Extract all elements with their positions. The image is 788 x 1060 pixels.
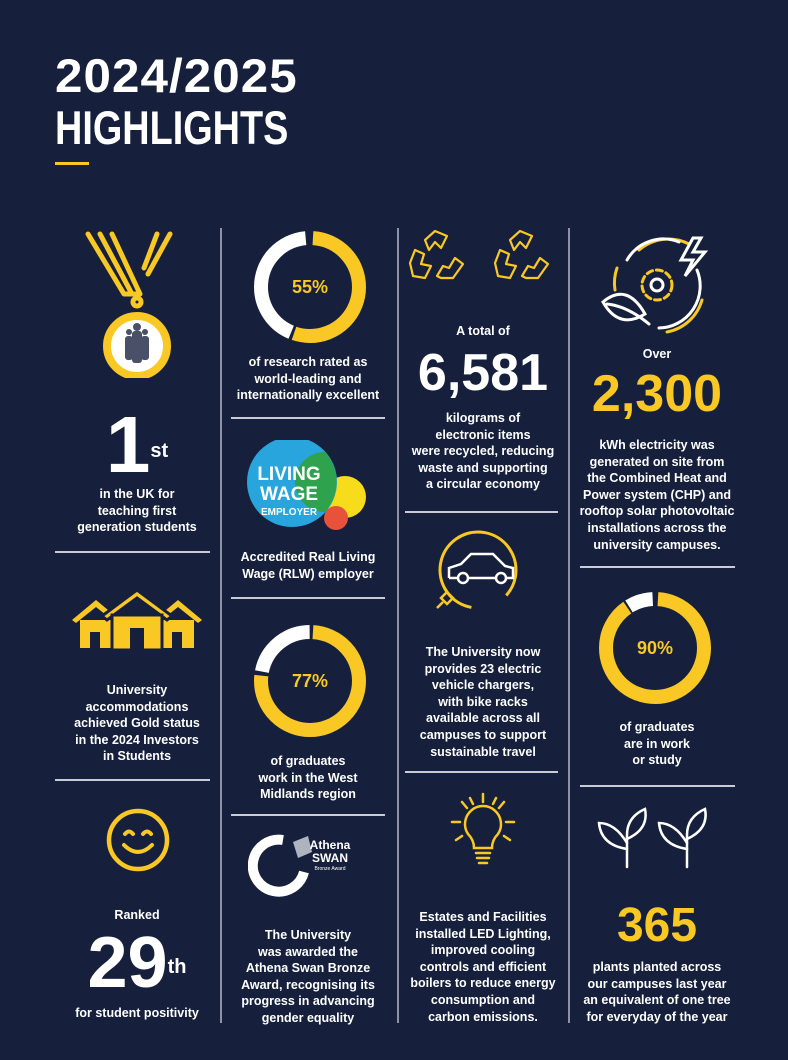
panel: athena swan: gender equality <box>262 1011 354 1025</box>
panel: electricity: installations across the <box>588 521 726 535</box>
chart: donut 55 <box>254 231 366 343</box>
icon: living wage logo: LIVING <box>257 464 321 485</box>
panel: athena swan: The University <box>265 928 351 942</box>
panel: athena swan: Award, recognising its <box>241 978 375 992</box>
panel: graduates 90%: are in work <box>624 737 690 751</box>
panel: graduates West Midlands 77% <box>254 625 366 801</box>
panel: recycling: electronic items <box>435 428 531 442</box>
panel: LED lighting: carbon emissions. <box>428 1010 538 1024</box>
icon: leaves <box>598 807 707 868</box>
panel: electricity: university campuses. <box>593 538 721 552</box>
panel: plants: our campuses last year <box>588 977 726 991</box>
panel: LED lighting: improved cooling <box>431 943 535 957</box>
panel: accommodation: University <box>107 683 167 697</box>
icon: athena swan logo: Athena <box>310 838 351 852</box>
panel: research 55%: of research rated as <box>249 355 367 369</box>
icon: athena swan logo: SWAN <box>312 851 348 865</box>
chart: donut 90: 90% <box>637 638 673 658</box>
icon: living wage logo: WAGE <box>260 484 318 505</box>
panel: EV chargers: The University now <box>426 645 540 659</box>
icon: living wage logo <box>247 440 366 530</box>
icon: light bulb <box>450 792 516 864</box>
panel: accommodation: achieved Gold status <box>74 716 200 730</box>
panel: LED lighting: boilers to reduce energy <box>410 976 556 990</box>
panel: recycling: waste and supporting <box>418 461 548 475</box>
panel: living wage: Accredited Real Living <box>241 550 375 564</box>
panel: electricity: the Combined Heat and <box>587 471 727 485</box>
panel: EV chargers <box>420 530 546 759</box>
panel: electricity: rooftop solar photovoltaic <box>580 504 734 518</box>
panel: plants: an equivalent of one tree <box>583 993 731 1007</box>
big: 365: 365 <box>617 899 697 952</box>
chart: donut 90 <box>599 592 711 704</box>
big: 6,581: 6,581 <box>418 344 548 402</box>
chart: donut 77 <box>254 625 366 737</box>
panel: accommodation: accommodations <box>86 700 188 714</box>
panel: recycling: were recycled, reducing <box>412 444 554 458</box>
panel: EV chargers: with bike racks <box>438 695 528 709</box>
panel: EV chargers: available across all <box>426 711 540 725</box>
panel: electricity: Power system (CHP) and <box>583 488 731 502</box>
panel: electricity: Over <box>643 347 671 361</box>
panel: recycling: A total of <box>456 324 510 338</box>
icon: athena swan logo: Bronze Award <box>314 866 346 872</box>
panel: student positivity: Ranked <box>114 908 160 922</box>
panel: EV chargers: campuses to support <box>420 728 546 742</box>
title <box>55 49 298 154</box>
panel: plants: plants planted across <box>593 960 721 974</box>
panel: EV chargers: vehicle chargers, <box>432 678 534 692</box>
panel: electricity: kWh electricity was <box>599 438 715 452</box>
panel: LED lighting: controls and efficient <box>420 960 546 974</box>
panel: student positivity <box>75 808 199 1020</box>
panel: student positivity: for student positivity <box>75 1006 199 1020</box>
big: 2,300: 2,300 <box>592 365 722 423</box>
panel: electricity <box>580 236 734 552</box>
panel: first generation: in the UK for <box>100 487 174 501</box>
panel: recycling <box>408 230 554 491</box>
icon: athena swan logo <box>248 834 351 897</box>
title: 2024/2025 <box>55 49 298 102</box>
panel: athena swan: progress in advancing <box>241 994 375 1008</box>
panel: electricity: generated on site from <box>590 455 724 469</box>
icon: medal <box>86 232 172 378</box>
panel: living wage <box>241 440 375 581</box>
panel: recycling: a circular economy <box>426 477 540 491</box>
panel: research 55%: internationally excellent <box>237 388 379 402</box>
title: HIGHLIGHTS <box>55 101 288 154</box>
panel: EV chargers: sustainable travel <box>430 745 536 759</box>
chart: donut 77: 77% <box>292 671 328 691</box>
icon: living wage logo: EMPLOYER <box>261 507 318 518</box>
chart: donut 55: 55% <box>292 277 328 297</box>
panel: athena swan: Athena Swan Bronze <box>246 961 370 975</box>
panel: first generation <box>77 232 197 534</box>
panel: graduates West Midlands 77%: work in the West <box>258 771 358 785</box>
panel: first generation: teaching first <box>98 504 176 518</box>
panel: LED lighting <box>410 792 556 1024</box>
panel: LED lighting: Estates and Facilities <box>419 910 547 924</box>
panel: accommodation <box>72 592 202 763</box>
big: 1st: 1st <box>106 400 168 489</box>
panel: recycling: kilograms of <box>446 411 520 425</box>
icon: recycle symbols <box>408 230 550 280</box>
panel: accommodation: in Students <box>103 749 171 763</box>
panel: graduates 90%: of graduates <box>619 720 694 734</box>
icon: electric car <box>436 530 518 609</box>
icon: smiley <box>106 808 170 872</box>
icon: houses <box>72 592 202 648</box>
panel: LED lighting: installed LED Lighting, <box>415 927 551 941</box>
panel: research 55% <box>237 231 379 402</box>
panel: EV chargers: provides 23 electric <box>425 662 541 676</box>
panel: living wage: Wage (RLW) employer <box>242 567 374 581</box>
panel: plants <box>583 807 731 1024</box>
panel: graduates West Midlands 77%: of graduates <box>270 754 346 768</box>
panel: graduates West Midlands 77%: Midlands region <box>260 787 356 801</box>
panel: graduates 90% <box>599 592 711 767</box>
panel: first generation: generation students <box>77 520 197 534</box>
panel: accommodation: in the 2024 Investors <box>75 733 199 747</box>
big: 29th: 29th <box>88 923 186 1003</box>
icon: energy gear leaf <box>601 236 708 334</box>
panel: graduates 90%: or study <box>632 753 682 767</box>
panel: athena swan <box>241 834 375 1025</box>
panel: athena swan: was awarded the <box>258 945 358 959</box>
panel: plants: for everyday of the year <box>586 1010 728 1024</box>
panel: research 55%: world-leading and <box>255 372 361 386</box>
panel: LED lighting: consumption and <box>431 993 535 1007</box>
